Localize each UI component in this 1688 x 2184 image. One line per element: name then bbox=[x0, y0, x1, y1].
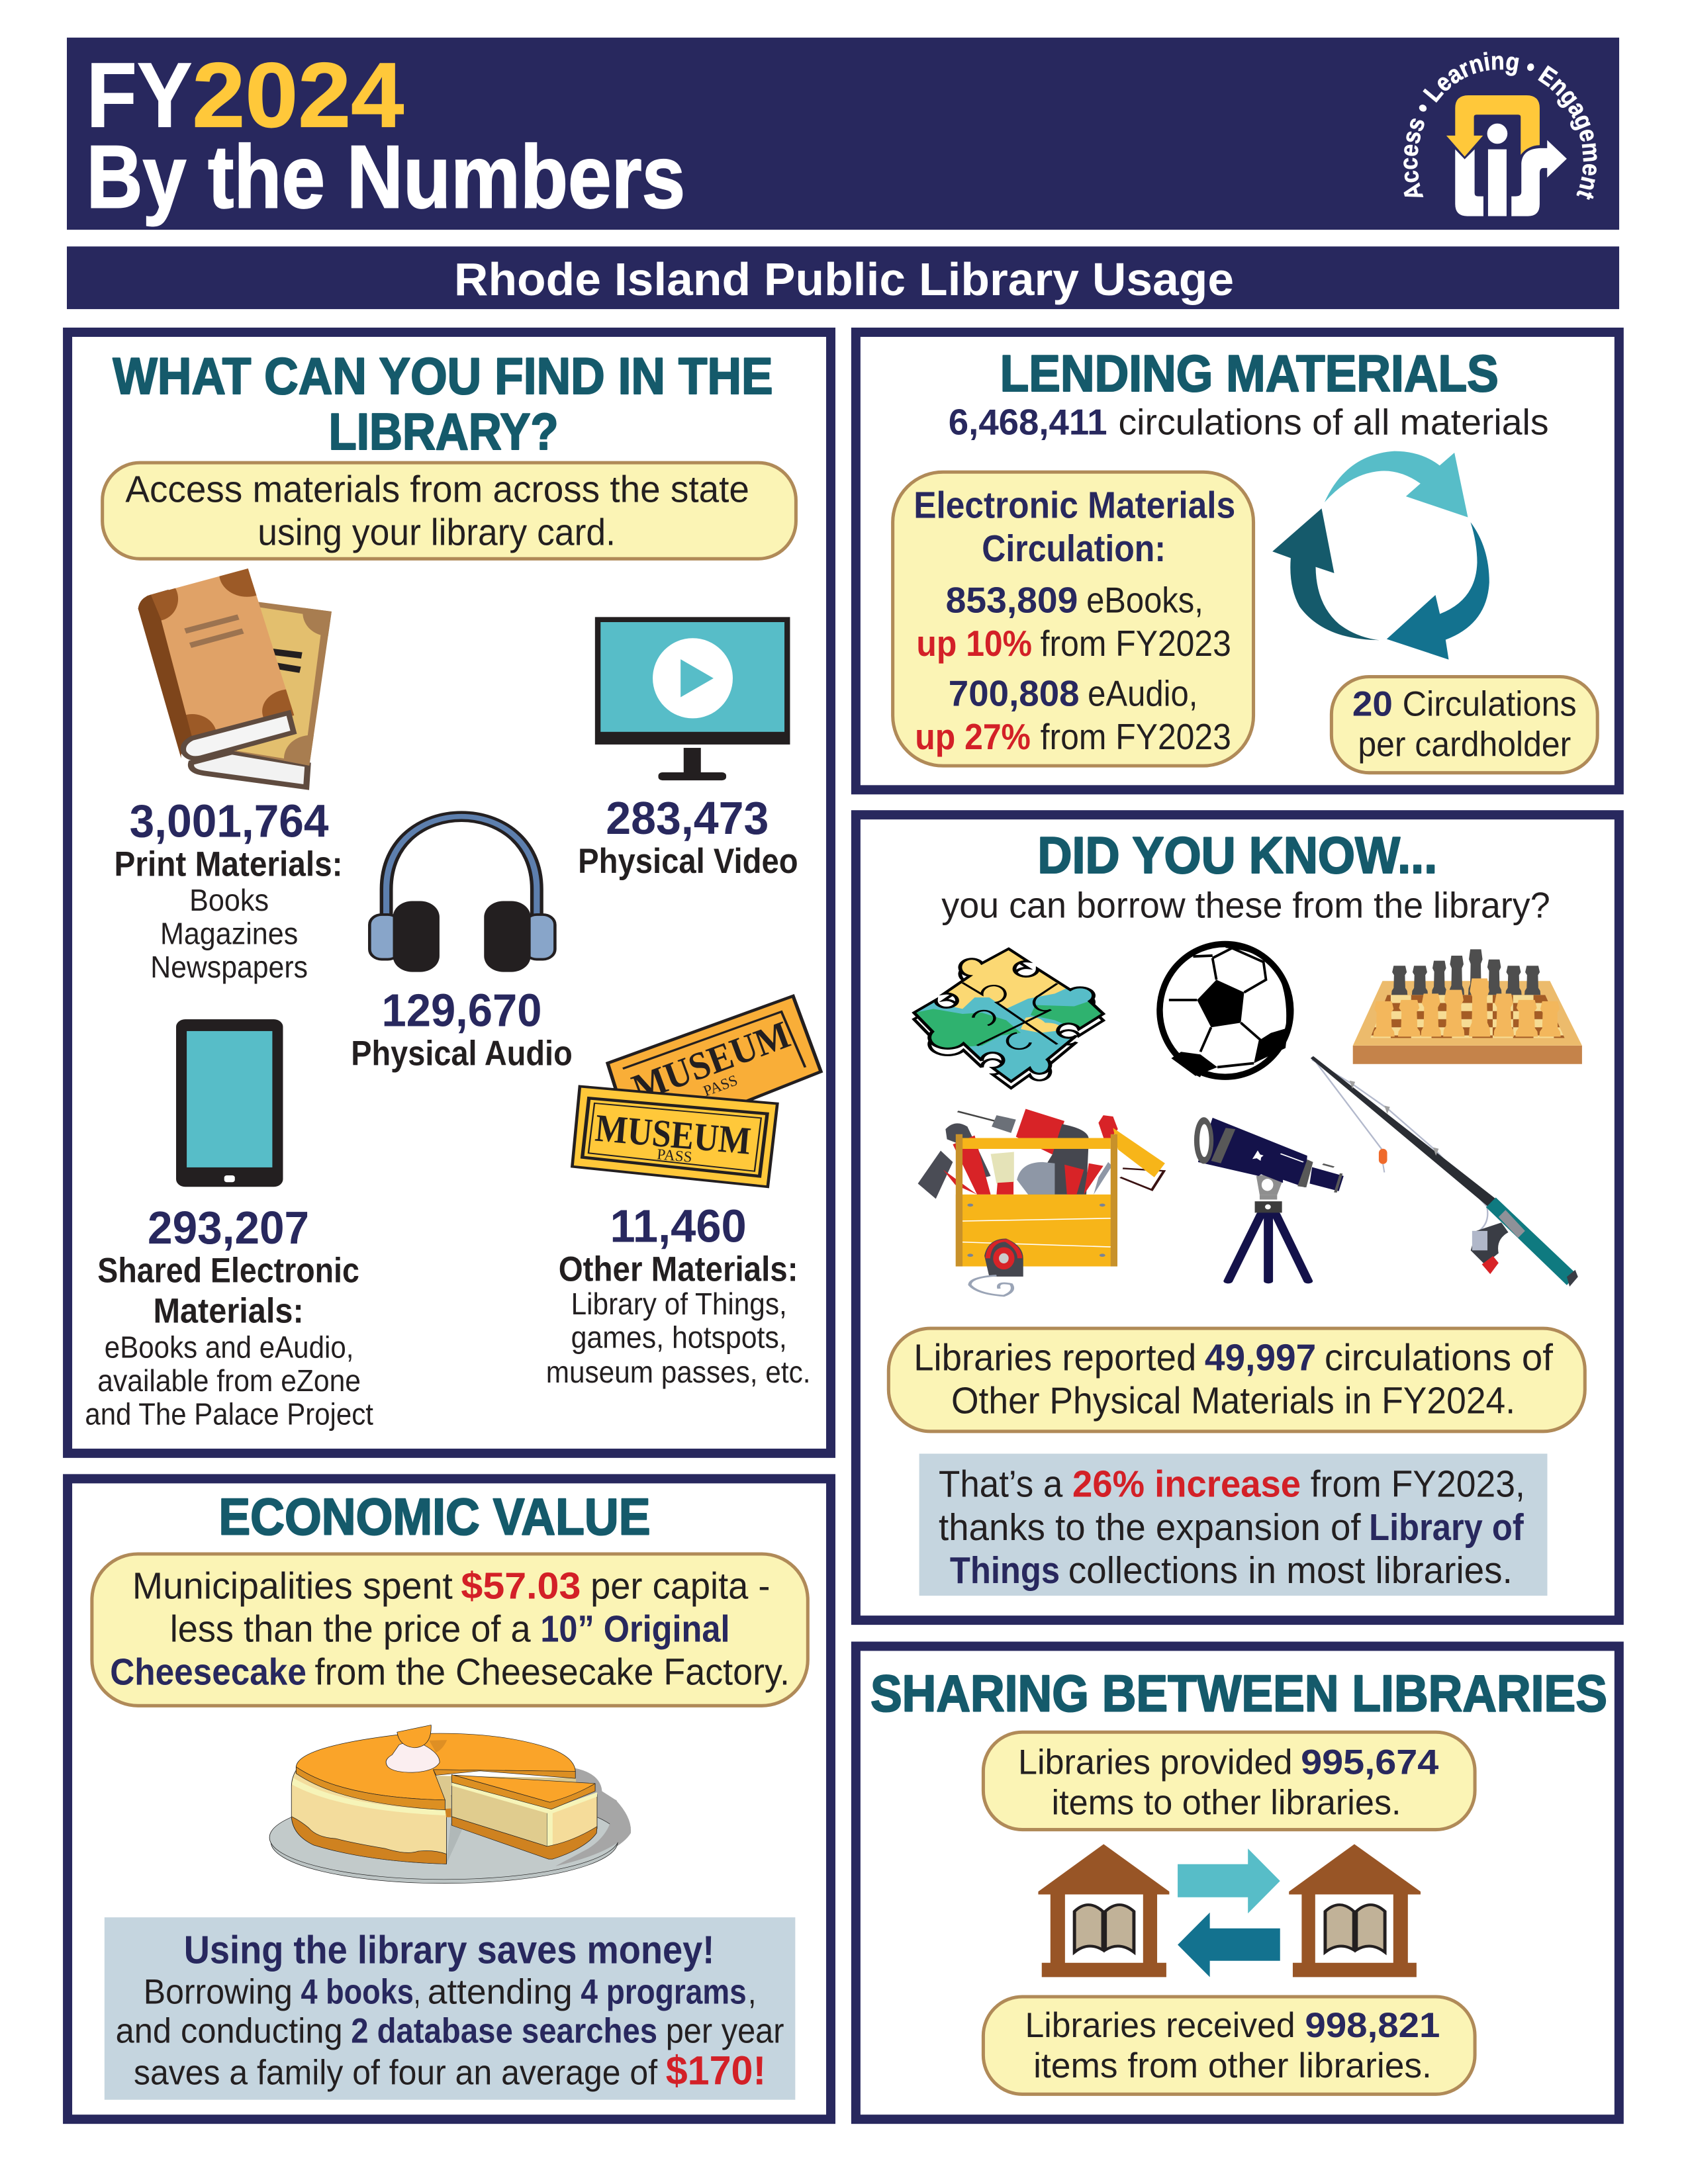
heading: what can you find: LIBRARY? bbox=[329, 404, 559, 461]
icon: fishing rod bbox=[1311, 1056, 1578, 1287]
callout: circulations per cardholder: per cardholder bbox=[1358, 725, 1571, 764]
icon: libraries exchanging books bbox=[1038, 1844, 1421, 1977]
heading: economic value: ECONOMIC VALUE bbox=[218, 1489, 651, 1546]
callout: circulations per cardholder: Circulations bbox=[1403, 684, 1577, 723]
callout: using the library saves money: 2 database searches bbox=[351, 2011, 657, 2050]
callout: municipal spending: Cheesecake bbox=[110, 1652, 306, 1694]
stat: other materials: museum passes, etc. bbox=[546, 1355, 811, 1389]
callout: circulations per cardholder: 20 bbox=[1352, 684, 1393, 723]
icon: puzzle bbox=[909, 944, 1108, 1088]
callout: electronic materials circulation: Circulation: bbox=[982, 528, 1166, 570]
callout: items received: Libraries received bbox=[1025, 2006, 1295, 2045]
stat: shared electronic materials: and The Palace Project bbox=[85, 1396, 373, 1431]
stat: shared electronic materials: eBooks and eAudio, bbox=[105, 1330, 353, 1364]
stat: physical video: Physical Video bbox=[578, 842, 798, 881]
callout: circulations of other physical materials: circulations of bbox=[1325, 1337, 1553, 1379]
heading: what can you find: WHAT CAN YOU FIND IN THE bbox=[113, 348, 773, 405]
callout: items provided bbox=[983, 1732, 1475, 1830]
callout: electronic materials circulation: 700,808 bbox=[949, 673, 1080, 714]
callout: items provided: items to other libraries. bbox=[1051, 1783, 1401, 1822]
header banner bbox=[67, 37, 1619, 230]
stat: print materials: Magazines bbox=[160, 916, 298, 950]
callout: municipal spending: from the Cheesecake Factory. bbox=[315, 1652, 790, 1694]
callout: municipal spending: 10” Original bbox=[540, 1609, 729, 1651]
callout: items received: 998,821 bbox=[1305, 2006, 1440, 2045]
callout: using the library saves money: 4 books bbox=[301, 1973, 414, 2012]
icon: museum passes: PASS bbox=[656, 1146, 693, 1166]
stat: print materials bbox=[115, 795, 343, 984]
panel: did you know bbox=[856, 815, 1619, 1620]
callout: electronic materials circulation: up 27% bbox=[915, 716, 1031, 757]
callout: using the library saves money: per year bbox=[666, 2011, 784, 2050]
icon: museum passes: MUSEUM bbox=[626, 1013, 796, 1110]
callout: 26% increase: collections in most libraries. bbox=[1068, 1550, 1513, 1592]
callout: electronic materials circulation: 853,809 bbox=[946, 580, 1078, 621]
callout: using the library saves money: , bbox=[748, 1973, 756, 2012]
stat: print materials: Newspapers bbox=[150, 950, 308, 984]
stat: shared electronic materials bbox=[85, 1202, 373, 1431]
callout: 26% increase: Library of bbox=[1369, 1507, 1524, 1549]
subtitle banner: Rhode Island Public Library Usage bbox=[454, 253, 1234, 305]
callout: electronic materials circulation: up 10% bbox=[916, 623, 1032, 664]
icon: toolbox bbox=[918, 1109, 1165, 1296]
callout: electronic materials circulation: eAudio, bbox=[1088, 673, 1197, 714]
panel: what can you find in the library bbox=[68, 332, 831, 1453]
icon: tablet bbox=[176, 1019, 283, 1187]
stat: other materials: 11,460 bbox=[610, 1201, 747, 1252]
title: FY2024: FY bbox=[86, 44, 192, 146]
callout: 26% increase: from FY2023, bbox=[1311, 1464, 1525, 1506]
callout: 26% increase: That’s a bbox=[939, 1464, 1063, 1506]
callout: 26% increase: Things bbox=[950, 1550, 1060, 1592]
icon: cheesecake bbox=[269, 1725, 631, 1884]
stat: shared electronic materials: available from eZone bbox=[97, 1363, 361, 1398]
callout: circulations of other physical materials: Other Physical Materials in FY2024. bbox=[951, 1380, 1515, 1422]
callout: items provided: Libraries provided bbox=[1018, 1743, 1292, 1782]
callout: circulations of other physical materials: Libraries reported bbox=[914, 1337, 1196, 1379]
icon: chess set bbox=[1353, 949, 1582, 1064]
icon: museum passes bbox=[572, 996, 821, 1187]
stat: other materials: games, hotspots, bbox=[571, 1320, 787, 1355]
stat: shared electronic materials: 293,207 bbox=[148, 1202, 309, 1253]
stat: physical audio: Physical Audio bbox=[351, 1034, 573, 1073]
callout: electronic materials circulation: from FY2023 bbox=[1041, 716, 1231, 757]
heading: sharing between libraries: SHARING BETWEEN LIBRARIES bbox=[870, 1666, 1607, 1723]
stat: total circulations: 6,468,411 bbox=[949, 401, 1107, 442]
subtitle banner bbox=[67, 246, 1619, 309]
callout: items provided: 995,674 bbox=[1301, 1743, 1438, 1782]
icon: telescope bbox=[1194, 1117, 1344, 1281]
panel: sharing between libraries bbox=[856, 1646, 1619, 2119]
callout: municipal spending bbox=[92, 1554, 808, 1706]
panel: economic value bbox=[68, 1479, 831, 2119]
callout: using the library saves money: saves a family of four an average of bbox=[134, 2054, 657, 2093]
icon: museum passes: PASS bbox=[701, 1071, 740, 1100]
stat: shared electronic materials: Materials: bbox=[153, 1292, 304, 1331]
callout: using the library saves money: Using the library saves money! bbox=[184, 1929, 714, 1972]
title: FY2024: 2024 bbox=[192, 44, 404, 146]
stat: print materials: Print Materials: bbox=[115, 844, 343, 884]
icon: headphones bbox=[369, 817, 555, 972]
callout: access materials: using your library card. bbox=[258, 512, 616, 553]
stat: print materials: Books bbox=[189, 883, 269, 917]
heading: did you know: DID YOU KNOW... bbox=[1037, 827, 1437, 884]
callout: access materials: Access materials from across the state bbox=[125, 469, 749, 510]
stat: physical audio: 129,670 bbox=[381, 985, 541, 1036]
stat: print materials: 3,001,764 bbox=[130, 795, 329, 846]
callout: electronic materials circulation bbox=[893, 472, 1254, 766]
panel: lending materials bbox=[856, 332, 1619, 790]
heading: lending materials: LENDING MATERIALS bbox=[1000, 345, 1499, 402]
callout: municipal spending: per capita - bbox=[590, 1565, 770, 1607]
callout: circulations per cardholder bbox=[1331, 677, 1597, 773]
stat: shared electronic materials: Shared Electronic bbox=[97, 1251, 359, 1291]
stat: total circulations: circulations of all materials bbox=[1118, 401, 1549, 442]
stat: physical audio bbox=[351, 985, 573, 1073]
logo: Access Learning Engagement: Access • Learning • Engagement bbox=[1403, 52, 1597, 200]
callout: items received: items from other libraries. bbox=[1033, 2046, 1432, 2085]
callout: access materials bbox=[103, 463, 796, 559]
callout: electronic materials circulation: eBooks, bbox=[1086, 580, 1203, 621]
stat: other materials: Other Materials: bbox=[559, 1250, 798, 1289]
stat: other materials: Library of Things, bbox=[571, 1287, 787, 1321]
callout: municipal spending: $57.03 bbox=[461, 1565, 581, 1607]
callout: municipal spending: less than the price of a bbox=[170, 1609, 531, 1651]
stat: physical video bbox=[578, 792, 798, 881]
icon: circulation arrows bbox=[1272, 451, 1489, 660]
callout: circulations of other physical materials bbox=[888, 1328, 1585, 1432]
callout: 26% increase: 26% increase bbox=[1072, 1464, 1301, 1506]
heading: what can you find bbox=[113, 348, 773, 461]
icon: books bbox=[138, 569, 332, 790]
callout: electronic materials circulation: Electronic Materials bbox=[914, 485, 1235, 527]
callout: using the library saves money bbox=[105, 1917, 795, 2100]
callout: using the library saves money: , bbox=[414, 1973, 420, 2012]
callout: using the library saves money: Borrowing bbox=[144, 1973, 293, 2012]
callout: electronic materials circulation: from FY2023 bbox=[1041, 623, 1231, 664]
callout: items received bbox=[983, 1997, 1475, 2094]
callout: using the library saves money: $170! bbox=[666, 2048, 766, 2093]
icon: soccer ball bbox=[1160, 944, 1291, 1077]
callout: using the library saves money: and conducting bbox=[116, 2011, 343, 2050]
text: you can borrow: you can borrow these from the library? bbox=[941, 884, 1550, 925]
callout: using the library saves money: 4 programs bbox=[581, 1973, 747, 2012]
callout: 26% increase bbox=[919, 1453, 1547, 1596]
callout: using the library saves money: attending bbox=[428, 1973, 573, 2012]
icon: monitor bbox=[595, 617, 790, 780]
stat: physical video: 283,473 bbox=[606, 792, 769, 844]
callout: municipal spending: Municipalities spent bbox=[132, 1565, 453, 1607]
stat: other materials bbox=[546, 1201, 811, 1389]
callout: 26% increase: thanks to the expansion of bbox=[939, 1507, 1361, 1549]
title: By the Numbers: By the Numbers bbox=[86, 126, 685, 226]
icon: museum passes: MUSEUM bbox=[594, 1107, 753, 1163]
callout: circulations of other physical materials: 49,997 bbox=[1205, 1337, 1316, 1379]
